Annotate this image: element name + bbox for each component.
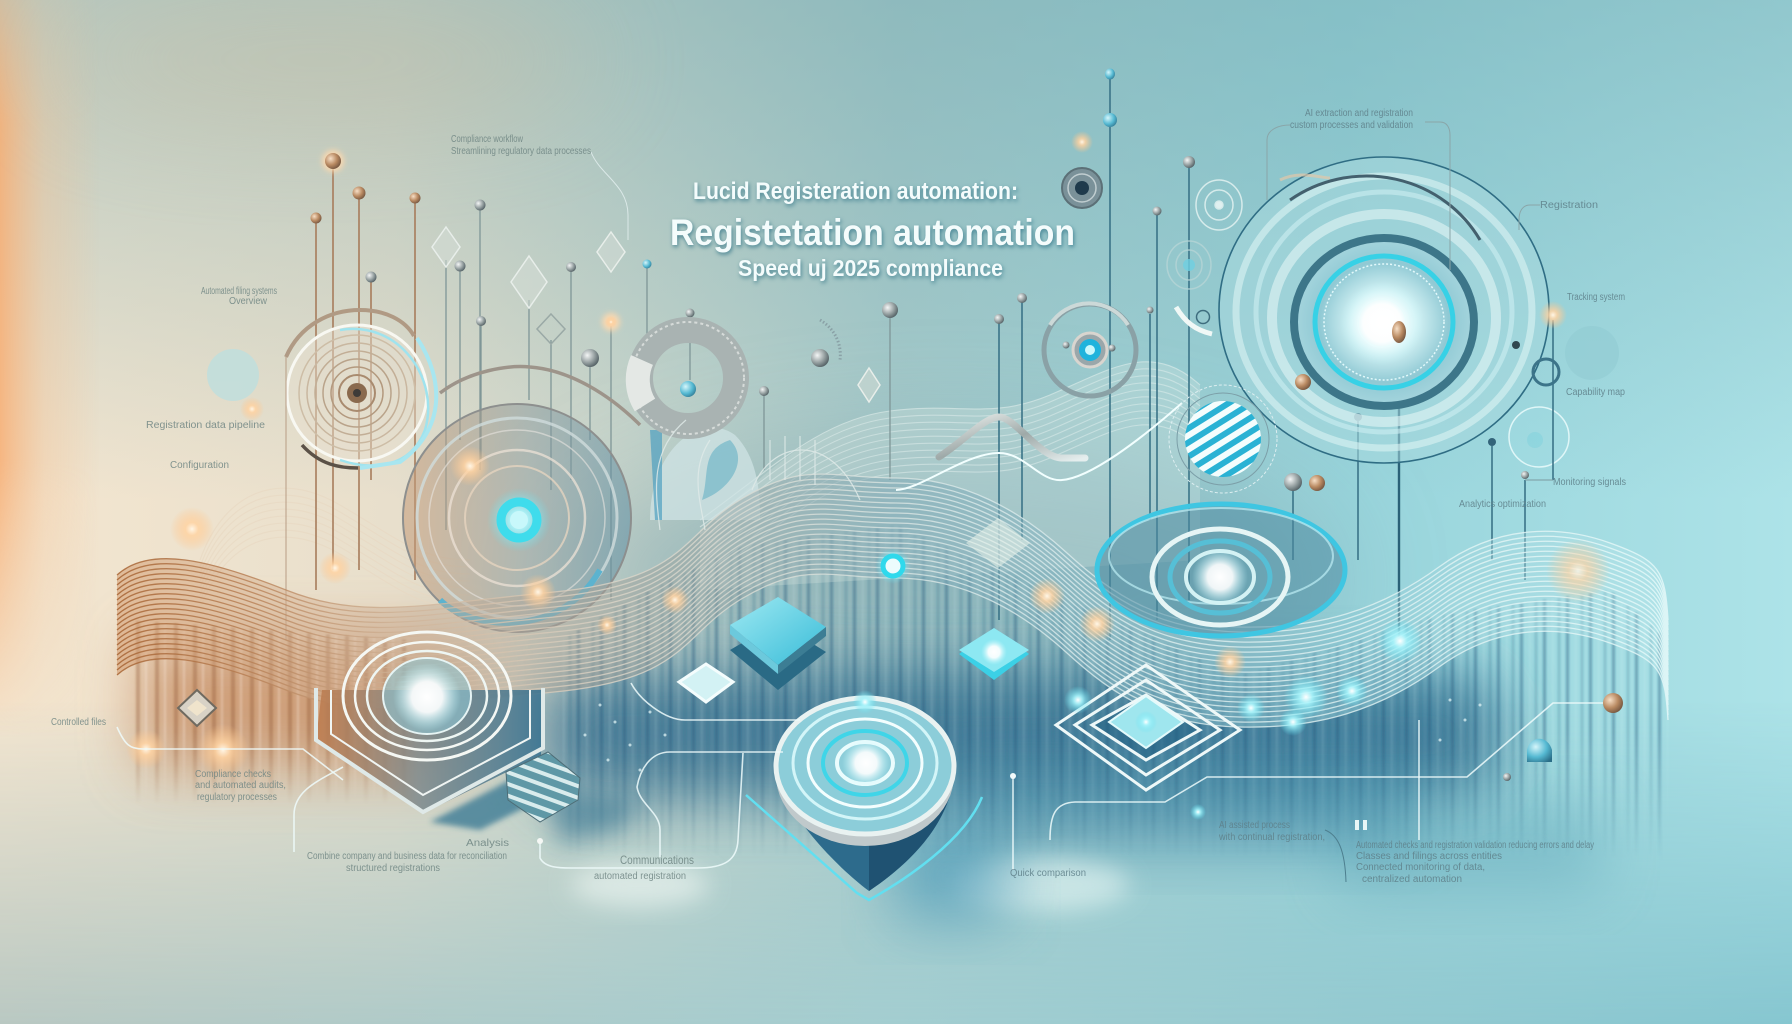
callout labels lower left: and automated audits,: [195, 780, 286, 791]
large disc left: [403, 404, 631, 632]
hexagonal shield device: [316, 632, 560, 830]
torus shape: [632, 322, 760, 520]
small diamond token: [178, 690, 216, 726]
orange glow nodes: [126, 131, 1610, 776]
circuit connector lines: [117, 122, 1605, 882]
callout labels lower right: Classes and filings across entities: [1356, 851, 1502, 862]
top spiral disc: [1062, 168, 1102, 208]
title: [670, 178, 1075, 281]
small white arc and ring: [1176, 307, 1212, 334]
pins with stems: [310, 68, 1553, 640]
data dots: [584, 698, 1482, 772]
callout labels lower right: AI assisted process: [1219, 820, 1290, 831]
callout labels lower left: regulatory processes: [197, 792, 277, 803]
dark copper ball: [1603, 693, 1623, 713]
cyan glow nodes: [853, 619, 1422, 820]
callout labels right: Tracking system: [1567, 292, 1625, 303]
callout labels right: AI extraction and registration: [1305, 108, 1413, 119]
callout labels right: Analytics optimization: [1459, 499, 1546, 510]
ghost wave left: [200, 488, 470, 609]
vertical stripe curtains: [130, 525, 1668, 900]
ghost diamonds: [432, 227, 880, 402]
large lens circle right: [1219, 157, 1549, 463]
pale background circles: [207, 326, 1619, 467]
title: Lucid Registeration automation:: [693, 178, 1018, 205]
title: Registetation automation: [670, 212, 1075, 253]
callout labels lower right: with continual registration,: [1218, 832, 1325, 843]
callout labels lower right: Automated checks and registration validation reducing errors and delay: [1356, 840, 1594, 851]
callout labels lower right: [1010, 820, 1594, 885]
callout labels left: Automated filing systems: [201, 286, 277, 297]
callout labels lower left: [195, 769, 694, 882]
ghost ring icons: [1167, 180, 1242, 289]
callout labels left: Configuration: [170, 460, 229, 471]
callout labels right: Monitoring signals: [1553, 477, 1626, 488]
callout labels lower left: Analysis: [466, 838, 509, 849]
callout labels lower right: Quick comparison: [1010, 868, 1086, 879]
teal chip: [730, 597, 826, 690]
title: Speed uj 2025 compliance: [738, 255, 1003, 281]
cyan ring node: [875, 548, 911, 584]
swirl circle left: [286, 310, 436, 640]
striped stack with diamond: [1056, 665, 1240, 790]
main wave ribbon lines: [117, 474, 1668, 727]
callout labels lower left: Communications: [620, 853, 694, 867]
callout labels left: Controlled files: [51, 717, 106, 728]
right ring icon: [1533, 359, 1559, 385]
callout labels right: Capability map: [1566, 387, 1625, 398]
callout labels right: [1290, 108, 1626, 510]
callout labels right: Registration: [1540, 200, 1598, 211]
peak ribbon and glowing line: [896, 403, 1182, 490]
ghost wave centre: [700, 362, 1200, 590]
central device: [746, 698, 982, 900]
small dome and dots: [537, 739, 1552, 844]
callout labels left: Compliance workflow: [451, 134, 524, 145]
callout labels lower right: centralized automation: [1362, 874, 1462, 885]
callout labels left: Registration data pipeline: [146, 420, 265, 431]
callout labels lower left: automated registration: [594, 871, 686, 882]
callout labels lower left: structured registrations: [346, 863, 440, 874]
cage arcs: [657, 420, 860, 530]
soft backdrop shadows: [140, 450, 1600, 920]
callout labels left: [51, 134, 591, 728]
small silver and copper balls: [811, 320, 1325, 491]
callout labels right: custom processes and validation: [1290, 120, 1413, 131]
striped hexagon: [506, 752, 640, 845]
white chip: [679, 664, 733, 702]
striped circle: [1169, 385, 1277, 493]
callout labels lower left: Compliance checks: [195, 769, 271, 780]
callout labels left: Streamlining regulatory data processes: [451, 146, 591, 157]
main wave ribbon fill: [117, 474, 1668, 727]
grey arc connector: [440, 367, 640, 425]
cyan diamond chip: [959, 628, 1029, 680]
orbit ring with blue core: [1044, 303, 1136, 396]
ghost diamond glowing: [966, 518, 1030, 568]
right device: [1097, 504, 1345, 636]
callout labels left: Overview: [229, 296, 268, 307]
callout labels lower left: Combine company and business data for reconciliation: [307, 851, 507, 862]
callout labels lower right: Connected monitoring of data,: [1356, 862, 1485, 873]
